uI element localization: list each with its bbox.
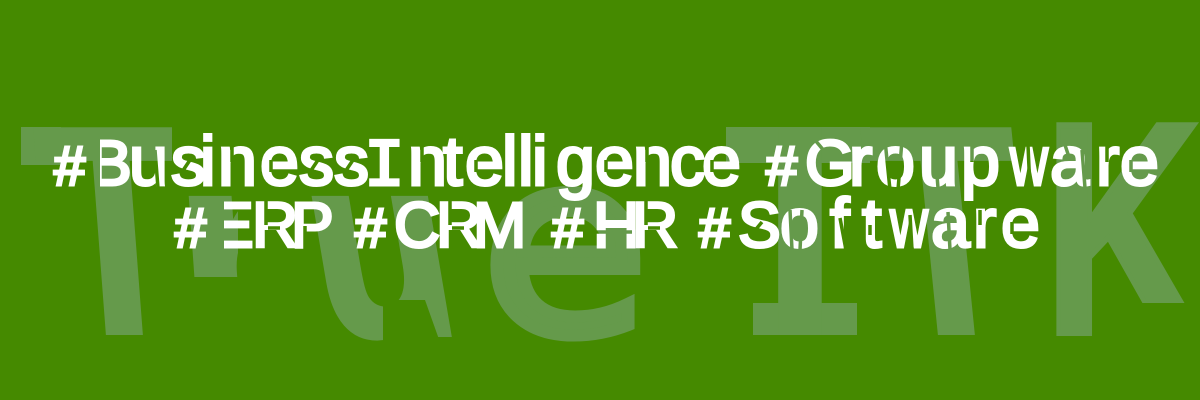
watermark: True ITK: r — [161, 98, 303, 398]
hashtag line 1: # — [766, 134, 797, 197]
hashtag line 1: G — [805, 127, 855, 199]
hashtag line 2: # — [699, 196, 730, 259]
hashtag line 2: # — [355, 196, 386, 259]
hashtag line 1: # — [54, 134, 85, 197]
letter w in Groupware: w — [1009, 123, 1048, 201]
watermark: True ITK: e — [482, 100, 648, 392]
banner — [21, 122, 1199, 342]
watermark: True ITK: u — [278, 98, 480, 399]
watermark: True ITK: I — [758, 62, 842, 399]
letter w in Software: w — [889, 185, 928, 263]
hashtag line 2: are — [931, 184, 1040, 262]
watermark: True ITK: K — [1044, 60, 1200, 397]
hashtag line 1: roup — [849, 122, 1000, 200]
hashtag line 1: B — [89, 127, 132, 199]
hashtag line 2: HR — [593, 189, 678, 261]
hashtag line 1: usiness — [129, 122, 369, 200]
hashtag line 1: I — [364, 129, 405, 206]
watermark: True ITK: T — [25, 63, 208, 400]
watermark: True ITK: T — [851, 62, 1041, 399]
hashtag line 2: ERP — [211, 189, 334, 261]
hashtag line 2: # — [175, 196, 206, 259]
hashtag line 1: are — [1050, 122, 1159, 200]
hashtag line 2: CRM — [394, 189, 526, 261]
hashtag line 2: oft — [780, 184, 881, 262]
hashtag line 1: ntelligence — [408, 122, 741, 200]
hashtags — [52, 133, 1158, 249]
hashtag line 2: # — [552, 196, 583, 259]
hashtag line 2: S — [738, 189, 781, 261]
watermark: True ITK — [21, 122, 1199, 342]
